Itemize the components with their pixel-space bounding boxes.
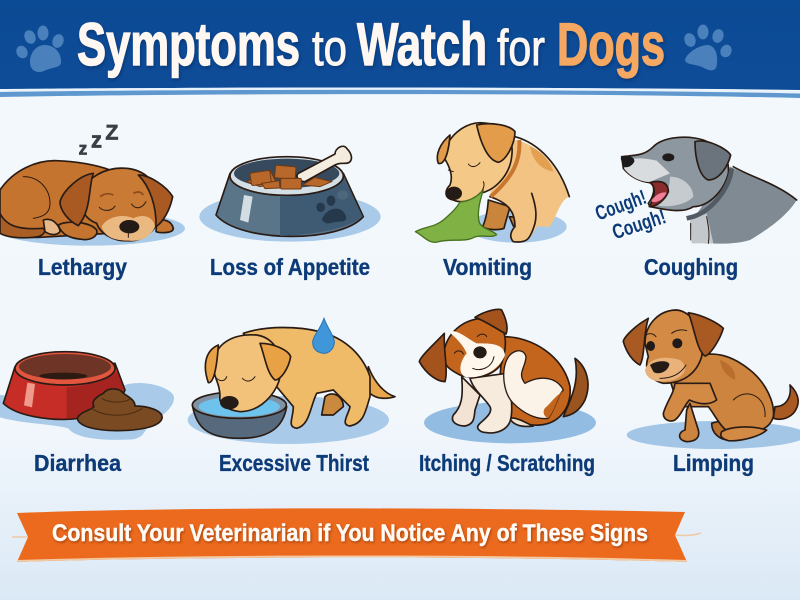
- icon: vomiting dog: [415, 123, 569, 243]
- icon: sleeping dog with zzz: z: [91, 127, 102, 152]
- title: Dogs: [557, 11, 665, 78]
- label: Vomiting: Vomiting: [443, 254, 532, 280]
- title: Watch: [357, 11, 487, 78]
- icon: sleeping dog with zzz: Z: [105, 120, 118, 144]
- panel: limping: [623, 310, 800, 476]
- panel: itching / scratching: [419, 309, 596, 476]
- label: Coughing: Coughing: [644, 254, 738, 280]
- label: Lethargy: Lethargy: [38, 254, 127, 280]
- label: Excessive Thirst: Excessive Thirst: [219, 450, 369, 476]
- panel: excessive thirst: [188, 318, 395, 476]
- header banner: [0, 0, 800, 98]
- icon: full food bowl with bone: [199, 146, 381, 242]
- icon: red bowl and stool: [0, 352, 174, 440]
- icon: sleeping dog with zzz: [0, 120, 185, 246]
- label: Limping: Limping: [673, 450, 754, 476]
- icon: coughing grey dog: [592, 137, 797, 244]
- icon: dog drinking from bowl with water drop: [188, 318, 395, 444]
- icon: coughing grey dog: Cough!: [609, 205, 669, 244]
- callout banner: consult your veterinarian: [12, 508, 701, 562]
- panel: vomiting: [415, 123, 569, 280]
- icon: right paw print: [682, 24, 734, 70]
- title: for: [497, 20, 545, 76]
- title: to: [312, 20, 347, 76]
- icon: coughing grey dog: Cough!: [592, 186, 650, 225]
- panel: diarrhea: [0, 352, 174, 476]
- icon: left paw print: [14, 26, 66, 72]
- icon: limping dog with raised paw: [623, 310, 800, 449]
- label: Itching / Scratching: Itching / Scratching: [419, 450, 595, 476]
- callout banner: consult your veterinarian: Consult Your Veterinarian if You Notice Any of These Signs: [52, 520, 648, 547]
- label: Diarrhea: Diarrhea: [34, 450, 121, 476]
- label: Loss of Appetite: Loss of Appetite: [210, 254, 370, 280]
- title: Symptoms: [77, 11, 300, 78]
- title: [77, 11, 665, 78]
- panel: loss of appetite: [199, 146, 381, 280]
- icon: sleeping dog with zzz: z: [79, 138, 88, 158]
- icon: scratching dog: [419, 309, 596, 443]
- panel: lethargy: [0, 120, 185, 280]
- panel: coughing: [592, 137, 797, 280]
